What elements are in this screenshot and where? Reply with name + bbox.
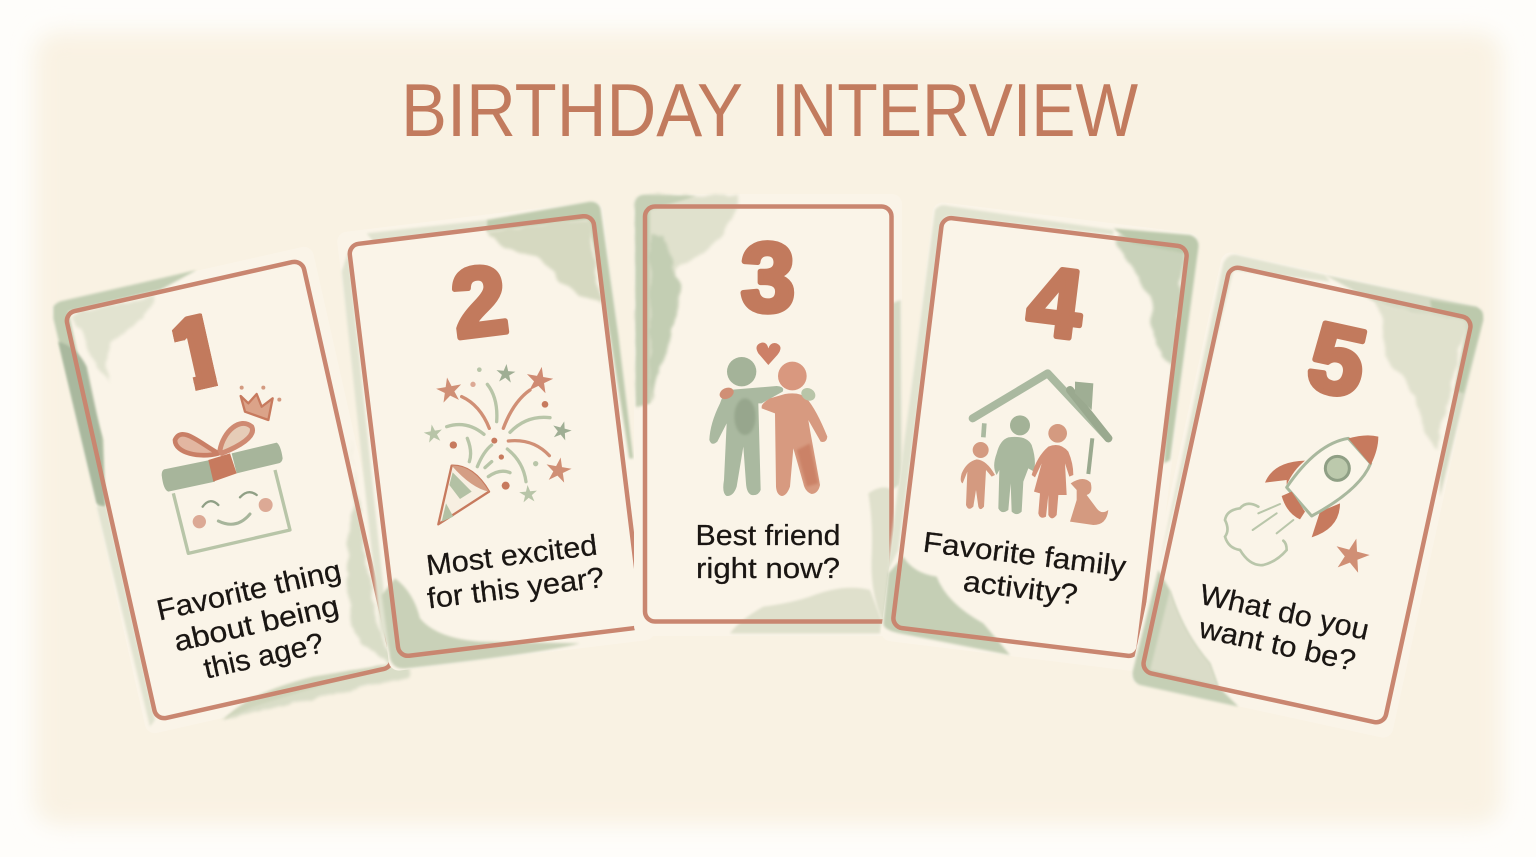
card 2 question: for this year? [425, 562, 606, 615]
icon: family under house roof [961, 373, 1108, 525]
card 2 sheet [336, 200, 656, 672]
title [401, 68, 1138, 152]
card 2 question: Most excited [424, 530, 599, 582]
card 1 question: Favorite thing [154, 555, 344, 627]
card 3 question: Best friend [696, 520, 840, 552]
card 3 number: 3 [741, 223, 795, 332]
panel: card 3 [634, 194, 902, 636]
icon: rocket with smoke cloud and star [1225, 435, 1378, 574]
card 2 number: 2 [446, 244, 513, 359]
panel: card 2 [336, 200, 656, 672]
card 5 question: want to be? [1195, 612, 1358, 678]
title: BIRTHDAY [401, 68, 743, 152]
card 4 question: activity? [961, 566, 1079, 612]
icon: two friends with heart [709, 343, 827, 496]
card 4 question: Favorite family [921, 527, 1128, 583]
card 5 border [1142, 266, 1472, 724]
card 5 question: What do you [1197, 579, 1372, 647]
card 3 question: right now? [696, 553, 840, 585]
card 5 watercolor washes [1133, 255, 1483, 707]
card 1 sheet [50, 245, 409, 735]
card 1 question: about being [171, 590, 342, 658]
card 1 border [65, 260, 394, 720]
card 1 question: this age? [201, 627, 327, 686]
card 1 number: 1 [158, 291, 240, 417]
card 5 sheet [1129, 251, 1485, 739]
card 3 question [696, 520, 840, 585]
card 3 sheet [634, 194, 902, 636]
card 4 border [892, 217, 1188, 657]
icon: party popper with fireworks [423, 363, 573, 524]
card 1 question [154, 555, 359, 693]
card 4 number: 4 [1022, 245, 1089, 360]
card 2 watercolor washes [342, 202, 633, 669]
card 2 border [349, 215, 643, 657]
card 3 watercolor washes [635, 195, 902, 633]
card 4 question [917, 527, 1128, 617]
card 3 border [645, 206, 892, 622]
card 2 question [421, 529, 606, 615]
card 4 watercolor washes [883, 205, 1199, 655]
panel: card 1 [50, 245, 410, 735]
card 1 watercolor washes [53, 270, 410, 727]
card 4 sheet [880, 201, 1200, 673]
icon: smiling gift box with crown [162, 386, 290, 553]
panel: card 4 [880, 201, 1200, 673]
card 5 number: 5 [1300, 301, 1375, 419]
card 5 question [1190, 579, 1372, 679]
title: INTERVIEW [771, 68, 1138, 152]
panel: card 5 [1129, 251, 1485, 739]
